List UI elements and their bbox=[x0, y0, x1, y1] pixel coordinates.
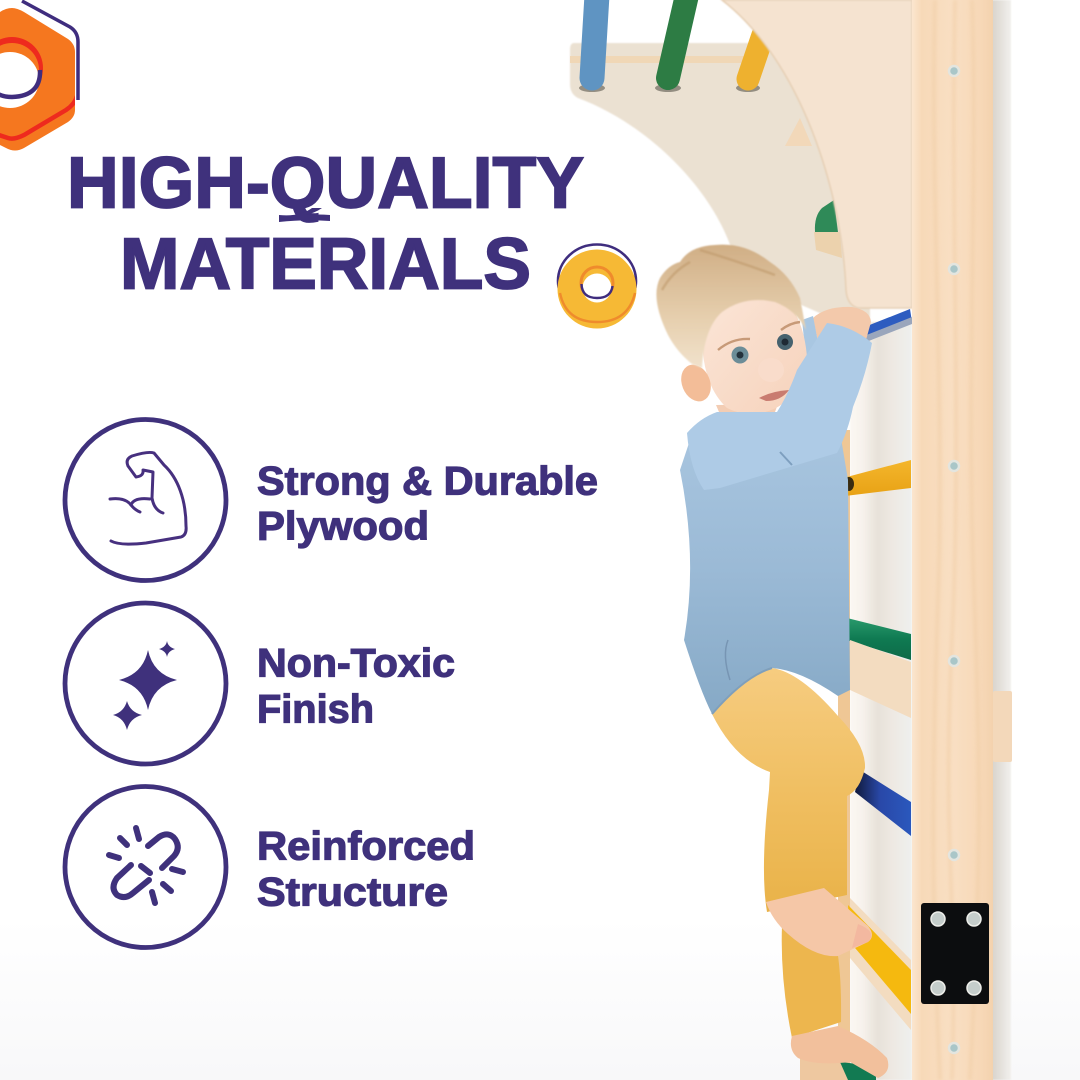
upper foot bbox=[766, 888, 872, 956]
ladder back wall bbox=[850, 322, 912, 1080]
feature: reinforced structure bbox=[65, 786, 475, 948]
black metal plate bbox=[921, 903, 989, 1004]
child bbox=[656, 245, 888, 1078]
orange inner ring bbox=[581, 267, 613, 299]
feature: strong and durable plywood bbox=[65, 420, 598, 580]
notch under panel bbox=[785, 118, 812, 146]
orange behind hole bbox=[0, 43, 39, 97]
lower foot bbox=[791, 1026, 888, 1078]
title line 1: HIGH-QUALITY bbox=[67, 144, 584, 224]
yellow washer bbox=[558, 250, 636, 328]
face bbox=[702, 290, 807, 414]
q tail swash bbox=[279, 208, 330, 222]
thigh and shin bbox=[712, 668, 865, 912]
icon: sparkles bbox=[113, 641, 177, 730]
rung: green bottom bbox=[840, 1062, 876, 1080]
hem of shirt bbox=[712, 668, 772, 714]
circle bbox=[65, 603, 226, 764]
rung: yellow lower with board bbox=[850, 898, 911, 1030]
rod: green bbox=[668, 0, 687, 78]
rail tab bbox=[993, 691, 1012, 762]
ladder side pole bbox=[838, 430, 850, 1080]
icon: broken link bbox=[109, 828, 183, 903]
rung: blue top bbox=[862, 309, 912, 342]
rung: yellow socket bbox=[844, 477, 854, 491]
icon: flexed muscle bbox=[110, 452, 186, 544]
eyes and brows bbox=[718, 322, 800, 364]
toes bbox=[852, 924, 871, 948]
wrist and hand on rung bbox=[813, 307, 871, 342]
hex nut decoration bbox=[0, 1, 78, 150]
rods on back panel bbox=[592, 0, 763, 79]
red ring bbox=[0, 37, 43, 99]
label second line: Finish bbox=[257, 688, 374, 732]
circle bbox=[65, 786, 226, 948]
screws bbox=[949, 66, 959, 1053]
wood grain bbox=[933, 0, 979, 1080]
label second line: Structure bbox=[257, 870, 448, 914]
front plywood arc panel bbox=[722, 0, 912, 308]
hair bbox=[656, 245, 806, 368]
rung: green bbox=[847, 618, 911, 660]
hair strands bbox=[662, 250, 775, 290]
lower far leg bbox=[782, 925, 841, 1038]
orange hex body bbox=[0, 8, 75, 150]
panel edge stripe bbox=[570, 56, 750, 63]
rod: blue bbox=[592, 0, 597, 78]
purple inner arc bbox=[582, 284, 612, 298]
purple hex outline bbox=[22, 1, 78, 100]
feature: non-toxic finish bbox=[65, 603, 455, 764]
rod shadows bbox=[579, 84, 760, 92]
rod bracket bbox=[814, 232, 842, 258]
short green rod bbox=[815, 200, 838, 232]
back plywood panel bbox=[570, 43, 870, 335]
ear bbox=[676, 360, 716, 406]
purple outline bbox=[558, 244, 636, 318]
rod: yellow bbox=[748, 35, 763, 79]
label: Reinforced bbox=[257, 824, 475, 868]
wall rail behind post bbox=[990, 0, 1011, 1080]
white hole bbox=[0, 52, 39, 108]
orange lower edge bbox=[560, 293, 635, 322]
title bbox=[67, 144, 584, 304]
photo: wooden climbing ladder and child bbox=[570, 0, 1012, 1080]
mouth bbox=[759, 390, 789, 401]
wooden post bbox=[912, 0, 993, 1080]
purple ring arc bbox=[0, 70, 40, 97]
label: Non-Toxic bbox=[257, 642, 455, 686]
sleeve fold bbox=[780, 452, 792, 465]
raised sleeve bbox=[687, 323, 872, 490]
nose bbox=[758, 358, 784, 382]
washer decoration bbox=[558, 244, 636, 328]
title line 2: MATERIALS bbox=[120, 224, 531, 304]
rung: blue lower bbox=[855, 770, 911, 836]
hole bbox=[582, 274, 612, 302]
label second line: Plywood bbox=[257, 504, 429, 548]
neck bbox=[716, 404, 778, 426]
wood board under green rung bbox=[850, 640, 911, 718]
red hex outline bbox=[0, 96, 77, 139]
back sleeve bbox=[802, 316, 818, 358]
shirt seam bbox=[725, 640, 730, 680]
shirt body bbox=[680, 420, 850, 714]
label: Strong & Durable bbox=[257, 460, 598, 504]
circle bbox=[65, 420, 226, 580]
pole base bbox=[800, 1058, 850, 1080]
rung: yellow bbox=[843, 460, 911, 496]
